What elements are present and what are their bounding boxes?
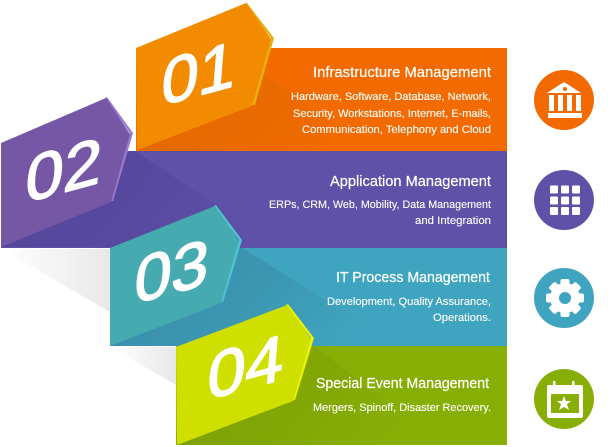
body text (269, 199, 492, 227)
tag (136, 3, 271, 150)
body text: Communication, Telephony and Cloud (302, 124, 491, 136)
floor shadow below panel 3 (110, 347, 176, 385)
number 04: 04 (205, 321, 287, 415)
band shadow (110, 248, 400, 346)
body text: Hardware, Software, Database, Network, (291, 91, 491, 103)
tag (110, 206, 239, 346)
body text (327, 296, 491, 324)
heading: Infrastructure Management (313, 65, 491, 81)
icon: gear (534, 268, 594, 328)
band shadow (1, 151, 280, 248)
tag edge (105, 97, 133, 201)
heading: Special Event Management (316, 376, 489, 392)
tag (176, 305, 311, 445)
icon: calendar star (534, 369, 594, 429)
tag edge (245, 3, 274, 105)
body text: Mergers, Spinoff, Disaster Recovery. (313, 402, 491, 414)
body text (291, 91, 491, 136)
floor shadow below panel 2 (1, 249, 110, 312)
tag edge (286, 304, 314, 400)
heading: IT Process Management (336, 270, 490, 286)
body text: ERPs, CRM, Web, Mobility, Data Management (269, 199, 492, 211)
icon: bank (534, 70, 594, 130)
purple band (1, 151, 507, 248)
body text: and Integration (415, 215, 491, 227)
icon: grid (534, 170, 594, 230)
body text: Development, Quality Assurance, (327, 296, 491, 308)
body text: Security, Workstations, Internet, E-mails, (293, 108, 491, 120)
panel: it process management (110, 205, 507, 346)
number 03: 03 (132, 225, 212, 319)
tag edge (214, 205, 242, 302)
orange band (136, 48, 507, 151)
panel: application management (1, 97, 507, 248)
teal band (110, 248, 507, 346)
number 01: 01 (159, 27, 239, 121)
panel: special event management (176, 304, 507, 445)
number 02: 02 (23, 124, 105, 218)
tag (1, 98, 130, 247)
body text: Operations. (433, 312, 491, 324)
band shadow (177, 346, 440, 445)
heading: Application Management (330, 174, 491, 190)
panel: infrastructure management (136, 3, 507, 151)
band shadow (137, 75, 375, 151)
green band (176, 346, 507, 445)
